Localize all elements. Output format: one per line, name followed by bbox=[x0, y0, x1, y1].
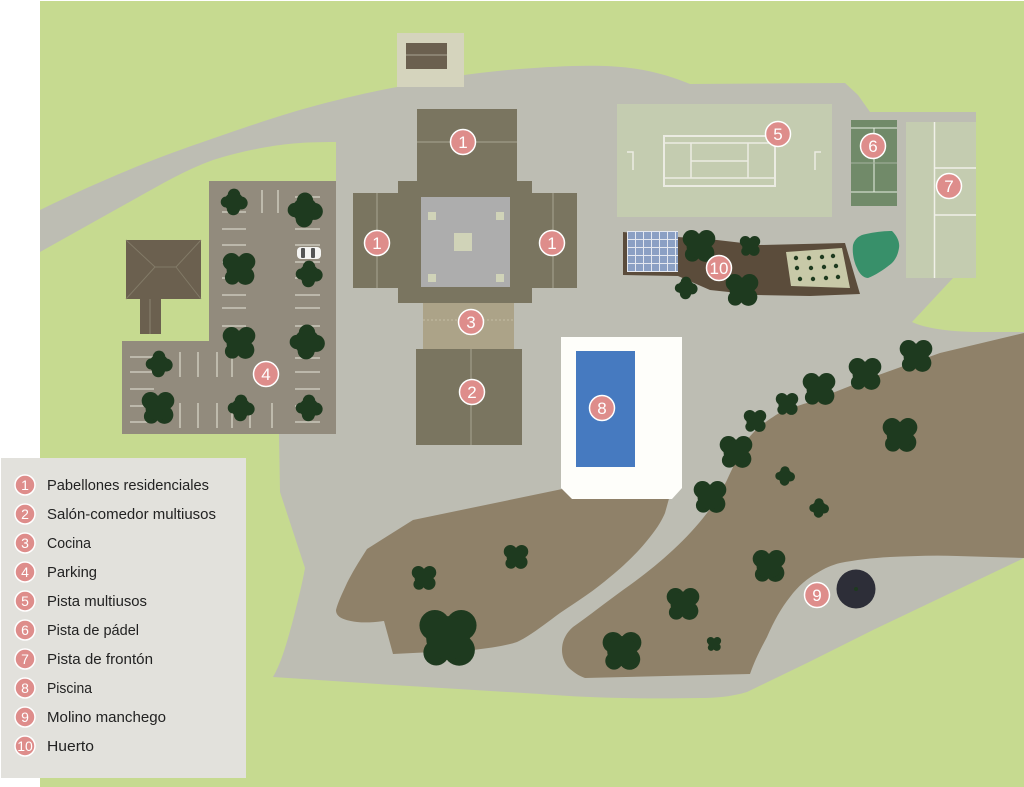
trees: parking bbox=[142, 189, 325, 424]
kitchen bbox=[423, 303, 514, 349]
legend panel: 6 bbox=[21, 622, 29, 638]
legend panel: Pista de frontón bbox=[47, 652, 153, 668]
legend panel: 5 bbox=[21, 593, 29, 609]
legend panel: Huerto bbox=[47, 739, 94, 755]
map number badges: 2 bbox=[467, 383, 477, 402]
residential pavilions bbox=[353, 109, 577, 303]
map number badges: 1 bbox=[547, 234, 557, 253]
map number badges: 5 bbox=[773, 125, 783, 144]
small building at the top bbox=[397, 33, 464, 87]
map number badges: 8 bbox=[597, 399, 607, 418]
legend panel: Cocina bbox=[47, 536, 92, 552]
legend panel: 1 bbox=[21, 477, 29, 493]
legend panel: 4 bbox=[21, 564, 29, 580]
parking area surface and bays bbox=[122, 181, 336, 434]
legend panel: Piscina bbox=[47, 681, 93, 697]
legend panel: Pabellones residenciales bbox=[47, 478, 209, 494]
legend panel: Pista multiusos bbox=[47, 594, 147, 610]
vegetable garden bbox=[623, 231, 860, 296]
trees: lower left land bbox=[412, 545, 528, 666]
brown land: lower right bbox=[562, 333, 1024, 678]
map number badges bbox=[254, 122, 962, 608]
map number badges: 3 bbox=[466, 313, 476, 332]
legend panel: Molino manchego bbox=[47, 710, 166, 726]
icon: windmill bbox=[836, 570, 876, 608]
map number badges: 4 bbox=[261, 365, 271, 384]
padel court bbox=[851, 120, 897, 206]
dining hall bbox=[416, 349, 522, 445]
legend panel: 3 bbox=[21, 535, 29, 551]
legend panel: 2 bbox=[21, 506, 29, 522]
fronton court bbox=[906, 122, 976, 278]
map number badges: 1 bbox=[458, 133, 468, 152]
icon: car bbox=[297, 247, 321, 259]
map number badges: 10 bbox=[710, 259, 728, 278]
multi-use court bbox=[617, 104, 832, 217]
trees: lower right land bbox=[603, 340, 932, 670]
legend panel: Parking bbox=[47, 565, 97, 581]
legend panel: 7 bbox=[21, 651, 29, 667]
map number badges: 7 bbox=[944, 177, 954, 196]
brown land: lower left bbox=[336, 487, 670, 654]
map number badges: 1 bbox=[372, 234, 382, 253]
legend panel: Salón-comedor multiusos bbox=[47, 507, 216, 523]
map number badges: 9 bbox=[812, 586, 822, 605]
legend panel bbox=[1, 458, 246, 778]
legend panel: 10 bbox=[17, 738, 33, 754]
map number badges: 6 bbox=[868, 137, 878, 156]
building west of the parking bbox=[126, 240, 201, 334]
green pond bbox=[853, 231, 899, 278]
swimming pool bbox=[561, 337, 682, 499]
road network bbox=[40, 66, 1024, 698]
legend panel: Pista de pádel bbox=[47, 623, 139, 639]
legend panel: 8 bbox=[21, 680, 29, 696]
legend panel: 9 bbox=[21, 709, 29, 725]
trees: vegetable garden bbox=[675, 230, 760, 306]
